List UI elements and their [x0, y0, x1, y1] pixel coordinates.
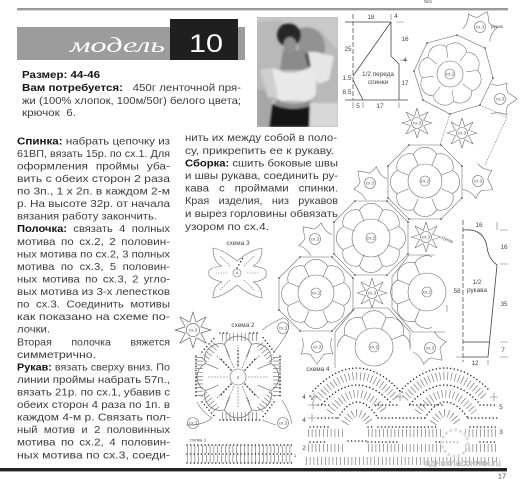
- diagram: scheme 4 edging chart: 3: [499, 429, 503, 436]
- diagram: half sleeve pattern: 16: [500, 244, 508, 251]
- diagram: half front/back pattern: 16: [401, 36, 409, 43]
- label: рукав: рукав: [491, 24, 504, 29]
- diagram: front motif layout: [279, 5, 517, 383]
- title banner: модель 10: модель: [68, 33, 165, 57]
- connecting stars: сх.3: [458, 130, 467, 136]
- diagram: scheme 1 stitch chart: [187, 438, 297, 463]
- label: рукав: [441, 24, 504, 245]
- text block: back, front and sleeve instructions: симметрично.: [17, 350, 96, 361]
- diagram: scheme 2 full motif: схема 2: [231, 322, 255, 329]
- motif: half motif bottom: [334, 308, 411, 368]
- half stars: сх.3: [476, 24, 485, 30]
- stars in corners of scheme 2: [175, 312, 292, 428]
- text block: back, front and sleeve instructions: 61ВП, вязать 15р. по сх.1. Для: [17, 149, 170, 160]
- watermark: одноклассники.ru: [425, 458, 501, 468]
- connecting stars: сх.3: [413, 120, 422, 126]
- diagram: half sleeve pattern: 35: [500, 301, 508, 308]
- diagram: half sleeve pattern: 7: [501, 347, 505, 354]
- half stars: [292, 5, 517, 371]
- half stars: сх.3: [313, 344, 322, 350]
- text block: size and materials: [22, 70, 241, 119]
- text block: size and materials: жи (100% хлопок, 100м/50г) белого цвета;: [22, 95, 241, 107]
- text block: back, front and sleeve instructions: каждом 4-м р. Связать пол-: [17, 413, 170, 424]
- diagram: scheme 2 full motif: [175, 312, 292, 428]
- diagram: half front/back pattern: 17: [401, 80, 409, 87]
- title banner: модель 10: [17, 19, 245, 60]
- motif: top rotated full motif: сх.2: [446, 72, 455, 76]
- connecting stars: сх.3: [422, 234, 431, 240]
- text block: assembly instructions: Края изделия, низ рукавов: [185, 196, 338, 207]
- motif: third full motif: сх.2: [367, 236, 376, 240]
- diagram: half sleeve pattern: 58: [453, 288, 461, 295]
- half stars: сх.3: [366, 180, 375, 186]
- diagram: scheme 3 star motif: [209, 240, 266, 298]
- diagram: half front/back pattern: 4: [394, 13, 398, 20]
- text block: back, front and sleeve instructions: [17, 135, 170, 461]
- half stars: сх.3: [311, 236, 320, 242]
- stars in corners of scheme 2: сх.3: [279, 326, 288, 330]
- diagram: half sleeve pattern: 16: [475, 222, 483, 229]
- half stars: сх.3: [474, 178, 483, 184]
- motif: top rotated full motif: [411, 35, 493, 114]
- text block: back, front and sleeve instructions: вязания работу закончить.: [17, 211, 157, 223]
- text block: assembly instructions: [185, 132, 338, 233]
- diagram: half front/back pattern: спинки: [368, 79, 388, 86]
- label: рукав: рукав: [441, 235, 455, 245]
- title banner: модель 10: 10: [189, 30, 223, 58]
- connecting stars: сх.3: [368, 290, 377, 296]
- text block: assembly instructions: Сборка: сшить боковые швы: [185, 158, 338, 170]
- half stars: сх.3: [426, 346, 435, 350]
- text block: back, front and sleeve instructions: Рукав: вязать сверху вниз. По: [17, 362, 170, 373]
- motif: third full motif: [334, 201, 408, 275]
- text block: back, front and sleeve instructions: мотива по сх.2, 2 половин-: [17, 237, 170, 248]
- motif: second full motif: [388, 145, 462, 219]
- diagram: scheme 4 edging chart: 4: [302, 417, 306, 424]
- text block: back, front and sleeve instructions: р. На высоте 32р. от начала: [17, 199, 170, 210]
- diagram: half front/back pattern: 25: [344, 46, 352, 53]
- text block: assembly instructions: нить их между собой в поло-: [185, 132, 337, 144]
- text block: back, front and sleeve instructions: лочки.: [17, 325, 50, 336]
- half stars: сх.3: [496, 96, 505, 102]
- motif: half motif right: [390, 254, 448, 332]
- text block: back, front and sleeve instructions: оформления проймы уба-: [17, 160, 170, 172]
- text block: assembly instructions: су, прикрепить ее к рукаву.: [185, 146, 334, 157]
- diagram: scheme 1 stitch chart: схема 1: [190, 438, 207, 442]
- stars in corners of scheme 2: сх.3: [189, 420, 198, 426]
- text block: back, front and sleeve instructions: вых мотива из 3-х лепестков: [17, 287, 170, 298]
- text block: back, front and sleeve instructions: обеих сторон 4 раза по 1п. в: [17, 399, 170, 411]
- motif: second full motif: сх.2: [421, 178, 430, 184]
- diagram: half sleeve pattern: рукава: [467, 287, 487, 294]
- diagram: half front/back pattern: 4: [403, 57, 407, 64]
- diagram: half front/back pattern: 1.5: [343, 75, 352, 82]
- diagram: scheme 4 edging chart: 4: [302, 394, 306, 401]
- photo: model in crochet top: [257, 17, 338, 127]
- diagram: half sleeve pattern: 1/2: [473, 279, 482, 286]
- text block: back, front and sleeve instructions: ных мотива по сх.2, 3 полных: [17, 249, 170, 260]
- text block: back, front and sleeve instructions: ных мотива по сх.3, соеди-: [17, 450, 170, 461]
- text block: assembly instructions: и вырез горловины обвязать: [185, 208, 338, 220]
- diagram: half front/back pattern: 5: [356, 103, 360, 110]
- text block: back, front and sleeve instructions: линии проймы набрать 57п.,: [17, 374, 170, 386]
- text block: assembly instructions: кава с проймами спинки.: [185, 184, 338, 194]
- diagram: half front/back pattern: 1/2 переда: [362, 71, 394, 78]
- connecting stars: [357, 108, 477, 308]
- watermark: [425, 430, 501, 468]
- motif: fourth full motif: сх.2: [312, 290, 321, 296]
- text block: size and materials: Вам потребуется: 450г ленточной пря-: [22, 82, 241, 94]
- text block: size and materials: Размер: 44-46: [22, 70, 100, 81]
- text block: back, front and sleeve instructions: как показано на схеме по-: [17, 312, 170, 323]
- stars in corners of scheme 2: сх.3: [279, 420, 288, 426]
- diagram: scheme 3 star motif: схема 3: [226, 240, 250, 247]
- diagram: half front/back pattern: [343, 13, 409, 110]
- diagram: scheme 4 edging chart: схема 4: [306, 366, 330, 373]
- text block: size and materials: крючок 6.: [22, 108, 76, 119]
- diagram: scheme 3 star motif: 4: [236, 270, 239, 276]
- text block: back, front and sleeve instructions: ных мотива по сх.3, 2 угло-: [17, 274, 170, 286]
- diagram: scheme 4 edging chart: 2: [302, 445, 306, 452]
- diagram: half front/back pattern: 17: [376, 103, 384, 110]
- diagram: scheme 4 edging chart: 5: [499, 404, 503, 411]
- text block: assembly instructions: узором по сх.4.: [185, 222, 269, 233]
- diagram: half front/back pattern: 8.5: [343, 89, 352, 96]
- text block: back, front and sleeve instructions: по 3п., 1 х 2п. в каждом 2-м: [17, 186, 170, 198]
- text block: back, front and sleeve instructions: мотива по сх.2, 4 половин-: [17, 438, 170, 449]
- text block: back, front and sleeve instructions: ный мотив и 2 половинных: [17, 425, 170, 436]
- diagram: scheme 4 edging chart: [302, 366, 503, 461]
- text block: back, front and sleeve instructions: Вторая полочка вяжется: [17, 337, 170, 348]
- stars in corners of scheme 2: сх.3: [189, 328, 198, 332]
- text block: back, front and sleeve instructions: по сх.3. Соединить мотивы: [17, 300, 170, 311]
- diagram: half sleeve pattern: [453, 220, 508, 367]
- diagram: scheme 2 full motif: 4: [237, 375, 240, 380]
- motif: fourth full motif: [279, 257, 353, 331]
- motif: half motif right: сх.2: [423, 290, 432, 294]
- text block: back, front and sleeve instructions: вязать 21р. по сх.1, убавив с: [17, 386, 170, 398]
- motif: half motif bottom: сх.2: [370, 344, 379, 350]
- top rule: [17, 8, 508, 10]
- text block: back, front and sleeve instructions: мотива по сх.3, 5 половин-: [17, 262, 170, 273]
- text block: assembly instructions: и швы рукава, соединить ру-: [185, 171, 338, 182]
- bottom rule: [0, 468, 507, 471]
- diagram: half front/back pattern: 18: [367, 14, 375, 21]
- text block: back, front and sleeve instructions: Полочка: связать 4 полных: [17, 224, 170, 235]
- text block: back, front and sleeve instructions: вить с обеих сторон 2 раза: [17, 173, 170, 185]
- diagram: half sleeve pattern: 12: [471, 360, 479, 367]
- text block: back, front and sleeve instructions: Спинка: набрать цепочку из: [17, 135, 170, 147]
- diagram: scheme 1 stitch chart: 1: [294, 453, 297, 458]
